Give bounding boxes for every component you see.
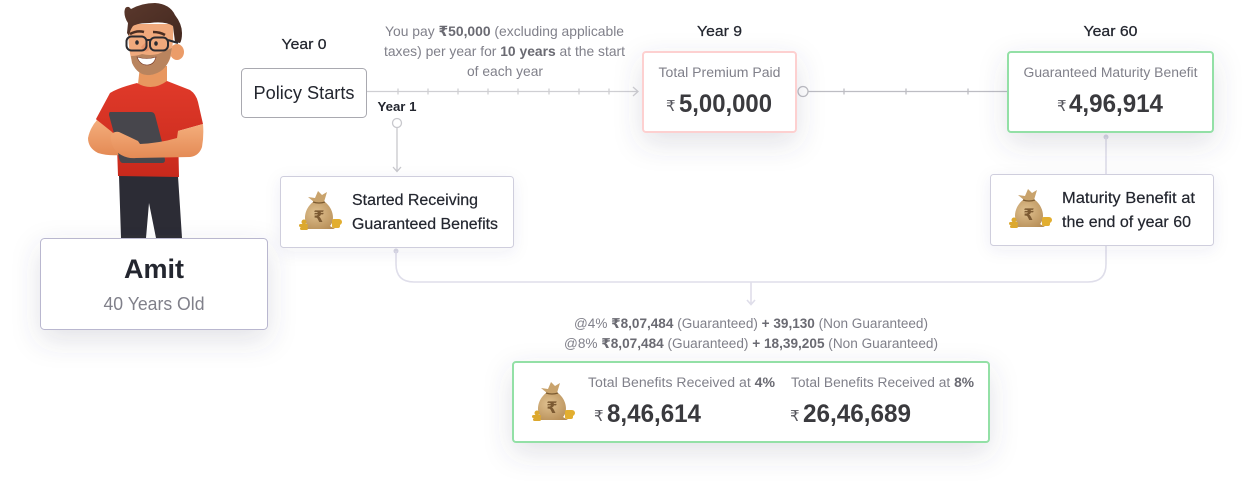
face	[128, 24, 173, 75]
panel: Started Receiving Guaranteed Benefits: Guaranteed Benefits	[352, 216, 498, 233]
panel: Total Premium Paid: ₹	[666, 98, 676, 115]
icon: money bag	[532, 382, 575, 421]
panel: Started Receiving Guaranteed Benefits: Started Receiving	[352, 192, 478, 209]
text: premium payment description	[384, 23, 625, 79]
benefit at 8%: ₹	[790, 408, 800, 425]
panel: Policy Starts: Policy Starts	[254, 83, 354, 103]
tablet	[109, 112, 165, 163]
panel: Amit name card	[40, 238, 268, 330]
icon: money bag: ₹	[313, 209, 325, 226]
label: Year 9: Year 9	[697, 23, 742, 40]
benefit at 4%: 8,46,614	[607, 400, 701, 428]
panel: Maturity Benefit at end of year 60: the end of year 60	[1062, 214, 1191, 231]
benefit at 8%: Total Benefits Received at 8%	[791, 375, 974, 390]
icon: money bag: ₹	[1023, 207, 1035, 224]
panel: Total Premium Paid: Total Premium Paid	[658, 65, 780, 80]
eyebrows	[130, 31, 165, 35]
benefit at 4%: ₹	[594, 408, 604, 425]
text: premium payment description: taxes) per year for 10 years at the start	[384, 43, 625, 59]
ear	[170, 44, 184, 60]
label: Year 0: Year 0	[282, 36, 326, 53]
right arm and hand	[111, 124, 203, 158]
text: guaranteed and non guaranteed breakdown	[564, 316, 938, 351]
smile	[137, 57, 156, 65]
t-shirt	[96, 81, 203, 177]
hair	[124, 3, 182, 43]
label: Year 60: Year 60	[1084, 23, 1138, 40]
left arm	[88, 120, 122, 155]
glasses	[126, 36, 178, 50]
trousers	[119, 176, 182, 238]
eyes	[135, 40, 158, 46]
panel: Started Receiving Guaranteed Benefits	[280, 176, 514, 248]
text: premium payment description: of each year	[467, 63, 543, 79]
benefit at 4%	[588, 375, 775, 428]
neck	[138, 66, 167, 89]
icon: money bag: ₹	[546, 400, 558, 417]
icon: money bag	[299, 191, 342, 230]
panel: Total Premium Paid	[643, 52, 796, 132]
timeline: premium payment years with arrow	[367, 87, 638, 96]
panel: Guaranteed Maturity Benefit	[1008, 52, 1213, 132]
panel: Maturity Benefit at end of year 60: Maturity Benefit at	[1062, 190, 1196, 207]
benefit at 8%: 26,46,689	[803, 400, 911, 428]
connector: benefits merge into totals	[394, 245, 1106, 304]
beard	[131, 48, 172, 75]
text: premium payment description: You pay ₹50,000 (excluding applicable	[385, 23, 624, 39]
panel: Guaranteed Maturity Benefit: 4,96,914	[1069, 90, 1163, 118]
panel: Guaranteed Maturity Benefit: Guaranteed Maturity Benefit	[1024, 65, 1198, 80]
timeline: year 9 to year 60	[798, 86, 1007, 96]
panel: Total Benefits Received	[513, 362, 989, 442]
text: guaranteed and non guaranteed breakdown: @4% ₹8,07,484 (Guaranteed) + 39,130 (Non Guaranteed)	[574, 316, 928, 331]
connector: year 1 to guaranteed benefits	[392, 118, 402, 172]
panel: Total Premium Paid: 5,00,000	[679, 90, 772, 118]
label: Year 1: Year 1	[378, 99, 416, 114]
text: guaranteed and non guaranteed breakdown: @8% ₹8,07,484 (Guaranteed) + 18,39,205 (Non Guaranteed)	[564, 336, 938, 351]
panel: Guaranteed Maturity Benefit: ₹	[1057, 98, 1067, 115]
benefit at 8%	[790, 375, 974, 428]
panel: Maturity Benefit at end of year 60	[990, 174, 1214, 246]
character: Amit	[88, 3, 203, 238]
connector: maturity benefit up to year 60 box	[1104, 134, 1108, 174]
age: 40 Years Old	[104, 294, 204, 314]
benefit at 4%: Total Benefits Received at 4%	[588, 375, 775, 390]
name: Amit	[124, 254, 184, 284]
nose	[141, 42, 149, 51]
icon: money bag	[1009, 189, 1052, 228]
panel: Policy Starts	[242, 68, 366, 118]
